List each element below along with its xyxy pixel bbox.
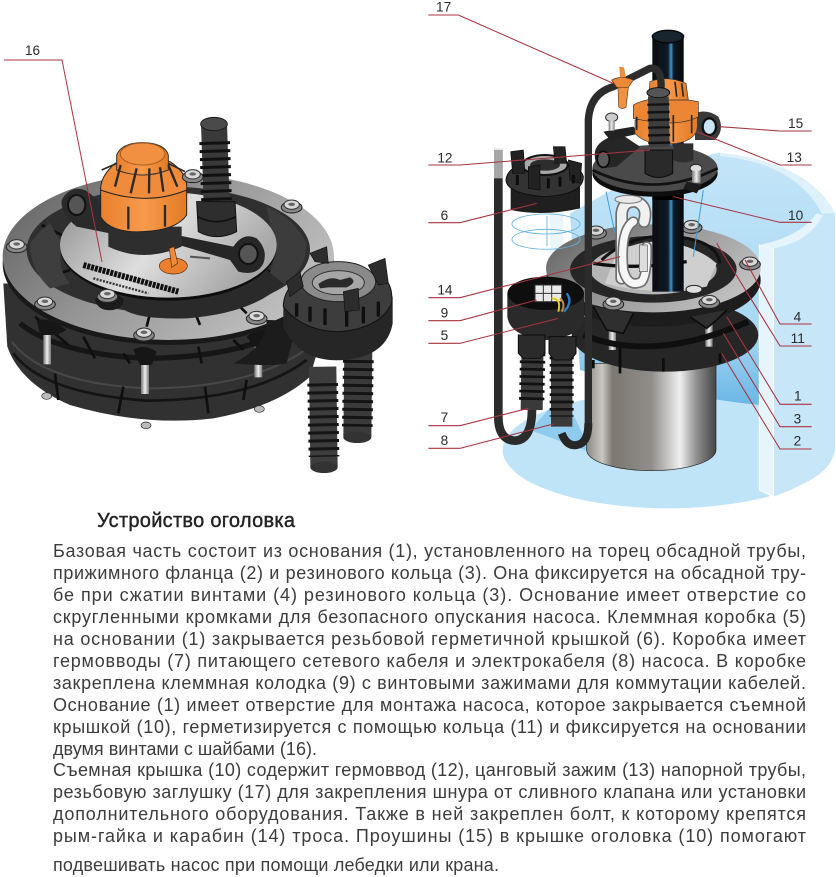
plate bolts xyxy=(6,170,302,341)
part numbers right: 8 xyxy=(441,433,448,448)
corrugated cable glands xyxy=(310,350,371,473)
collet clamp on lid xyxy=(633,79,698,144)
power cable xyxy=(494,148,532,441)
pressure pipe xyxy=(652,30,684,292)
callout 16 on left diagram xyxy=(4,43,102,262)
part numbers right: 7 xyxy=(441,410,448,425)
callout 16 on left diagram: 16 xyxy=(25,43,40,58)
part numbers right: 2 xyxy=(794,434,801,449)
part numbers right: 3 xyxy=(794,412,801,427)
part numbers right xyxy=(436,0,805,449)
logo on lid xyxy=(83,265,178,293)
part numbers right: 6 xyxy=(441,208,448,223)
part numbers right: 4 xyxy=(794,309,802,324)
part numbers right: 11 xyxy=(791,331,805,346)
collet clamp in orange xyxy=(101,143,187,255)
description text: скругленными кромками для безопасного опускания насоса. Клеммная коробка (5) xyxy=(53,607,806,627)
part numbers right: 10 xyxy=(788,208,804,223)
description text: Съемная крышка (10) содержит гермоввод (12), цанговый зажим (13) напорной трубы, xyxy=(53,760,806,780)
part numbers right: 5 xyxy=(441,328,449,343)
part numbers right: 9 xyxy=(441,305,448,320)
lugs and arms xyxy=(62,189,265,273)
description text: бе при сжатии винтами (4) резинового кольца (3). Основание имеет отверстие со xyxy=(53,585,806,605)
eye nut and carabiner xyxy=(615,195,647,283)
cable gland 12 xyxy=(645,88,673,177)
heading: Устройство оголовка xyxy=(97,510,296,532)
base flange xyxy=(572,298,758,373)
description text: Базовая часть состоит из основания (1), установленного на торец обсадной трубы, xyxy=(53,541,806,561)
part numbers right: 14 xyxy=(437,282,453,297)
wiring cord and plug 17 xyxy=(562,67,661,445)
corrugated glands 7 and 8 xyxy=(518,335,576,427)
description text: прижимного фланца (2) и резинового кольца (3). Она фиксируется на обсадной тру- xyxy=(53,563,806,583)
part numbers right: 1 xyxy=(794,389,802,404)
terminal box with clamp block xyxy=(507,277,584,340)
right diagram: exploded well head in casing xyxy=(428,0,835,508)
base with grey ring xyxy=(546,220,761,333)
well casing xyxy=(503,153,835,508)
left diagram: assembled well head xyxy=(3,117,393,473)
description text: резьбовую заглушку (17) для закрепления шнура от сливного клапана или установки xyxy=(53,782,806,802)
description text: Основание (1) имеет отверстие для монтажа насоса, которое закрывается съемной xyxy=(53,695,806,715)
description text: двумя винтами с шайбами (16). xyxy=(53,739,317,759)
description text xyxy=(53,541,806,875)
description text: на основании (1) закрывается резьбовой герметичной крышкой (6). Коробка имеет xyxy=(53,629,806,649)
lower body and flange xyxy=(3,283,333,429)
top plate xyxy=(3,173,334,345)
steel pump body xyxy=(587,363,716,471)
description text: закреплена клеммная колодка (9) с винтовыми зажимами для коммутации кабелей. xyxy=(53,673,806,693)
description text: подвешивать насос при помощи лебедки или крана. xyxy=(53,855,499,875)
threaded cap 6 xyxy=(506,147,583,213)
description text: гермовводы (7) питающего сетевого кабеля и электрокабеля (8) насоса. В коробке xyxy=(53,651,806,671)
o-ring spirals xyxy=(512,190,703,257)
terminal box with lid xyxy=(233,247,393,365)
description text: рым-гайка и карабин (14) троса. Проушины (15) в крышке оголовка (10) помогают xyxy=(53,826,806,846)
description text: крышкой (10), герметизируется с помощью кольца (11) и фиксируется на основании xyxy=(53,717,806,737)
removable lid xyxy=(592,111,721,197)
part numbers right: 17 xyxy=(436,0,451,15)
part numbers right: 15 xyxy=(788,116,804,131)
plug 17 in orange xyxy=(159,247,187,274)
part numbers right: 13 xyxy=(787,150,802,165)
cable gland upper xyxy=(197,117,237,237)
leader lines right xyxy=(428,15,812,449)
part numbers right: 12 xyxy=(437,150,453,165)
description text: дополнительного оборудования. Также в ней закреплен болт, к которому крепятся xyxy=(53,804,806,824)
